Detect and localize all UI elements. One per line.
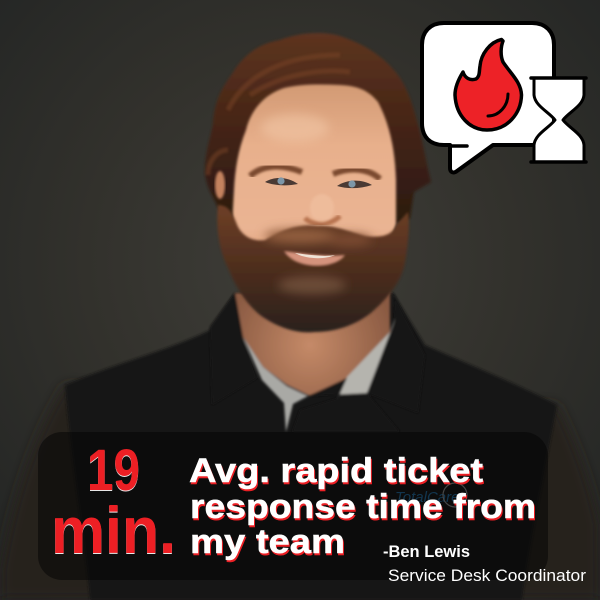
nose — [305, 194, 340, 224]
attribution: -Ben Lewis — [383, 542, 470, 561]
neck — [235, 290, 390, 396]
torso — [65, 293, 557, 600]
hourglass — [534, 78, 584, 162]
shirt — [0, 290, 600, 600]
heading text — [189, 452, 536, 561]
heading text: response time from — [190, 488, 536, 526]
beard — [217, 205, 409, 332]
hair highlights — [208, 55, 350, 175]
lower lip — [284, 251, 345, 266]
bubble inner line — [450, 144, 467, 148]
collar right — [367, 293, 425, 413]
hourglass caps — [531, 78, 586, 162]
undershirt right — [338, 318, 395, 400]
flame highlight — [488, 94, 508, 116]
right eyebrow — [333, 170, 380, 179]
stat: 19 min.: 19 — [87, 438, 140, 503]
moustache and chin highlights — [264, 229, 372, 294]
forehead highlight — [261, 114, 329, 142]
stat: 19 min. — [51, 438, 176, 567]
right eye — [337, 180, 372, 188]
collar left — [210, 293, 257, 405]
attribution: Service Desk Coordinator — [388, 566, 586, 585]
left eyebrow — [250, 166, 302, 176]
heading text: my team — [190, 523, 345, 561]
undershirt left — [243, 337, 308, 432]
translucent caption panel — [38, 432, 548, 580]
teeth — [295, 253, 335, 258]
left eye — [265, 177, 298, 185]
speech bubble — [422, 23, 554, 172]
flame — [455, 40, 522, 130]
stat: 19 min.: min. — [51, 493, 176, 567]
sleeves — [0, 385, 600, 600]
ear — [215, 171, 225, 199]
faint shirt logo: TotalCare — [395, 489, 459, 506]
heading text: Avg. rapid ticket — [189, 452, 483, 490]
hair — [205, 33, 431, 225]
placket — [292, 378, 400, 432]
faint shirt logo — [395, 483, 467, 507]
icon: chat bubble with flame and hourglass — [422, 23, 586, 172]
attribution — [383, 542, 586, 585]
face — [232, 84, 396, 290]
